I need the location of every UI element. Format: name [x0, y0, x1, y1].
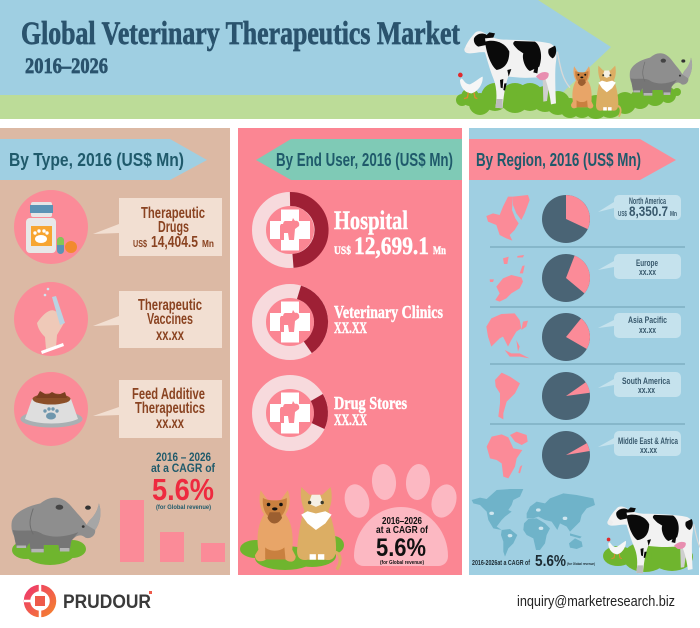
callout: therapeutic vaccines: xx.xx [156, 327, 184, 344]
pie: middle east and africa [542, 431, 590, 479]
header banner [0, 0, 700, 119]
callout: north america [598, 195, 681, 220]
pie: north america [542, 195, 590, 243]
panel: by type [0, 128, 230, 575]
panel: by end user [238, 128, 462, 575]
pie: europe [542, 254, 590, 302]
paw CAGR badge: 2016–2026 [382, 515, 422, 527]
callout: europe: xx.xx [639, 267, 657, 278]
icon: food bowl [14, 372, 88, 446]
world map CAGR note [472, 553, 595, 570]
illustration: dog and cat on grass [240, 487, 344, 570]
paw CAGR badge: (for Global revenue) [380, 560, 424, 566]
world map CAGR note: (for Global revenue) [567, 561, 595, 566]
end user heading: By End User, 2016 (US$ Mn) [276, 150, 453, 170]
callout: feed additive therapeutics [93, 380, 222, 438]
callout: therapeutic drugs: 14,404.5 [151, 234, 198, 251]
paw CAGR badge [341, 463, 461, 566]
illustration: cow and chicken on grass [603, 506, 700, 574]
callout: asia pacific [598, 313, 681, 338]
hospital value: US$ [334, 243, 351, 257]
donut: drug stores [259, 382, 321, 444]
bar chart [120, 500, 225, 562]
callout: south america: South America [622, 376, 671, 387]
callout: therapeutic drugs: Drugs [158, 219, 189, 236]
icon: hand with syringe [14, 282, 88, 356]
map: asia pacific [486, 313, 530, 358]
CAGR text: at a CAGR of [151, 461, 216, 475]
drug stores value [334, 393, 407, 429]
veterinary clinics value: XX.XX [334, 320, 367, 337]
callout: feed additive therapeutics: Feed Additive [132, 386, 205, 403]
logo: prudour: PRUDOUR [63, 592, 151, 613]
CAGR text [151, 450, 216, 511]
callout: therapeutic drugs [93, 198, 222, 256]
callout: therapeutic vaccines [93, 291, 222, 348]
drug stores value: Drug Stores [334, 393, 407, 413]
contact email: inquiry@marketresearch.biz [517, 593, 675, 610]
pie: asia pacific [542, 313, 590, 361]
end user heading arrow [256, 139, 462, 180]
veterinary clinics value [334, 302, 443, 337]
callout: europe: Europe [636, 258, 658, 269]
donut: veterinary clinics [259, 291, 321, 353]
world map [472, 489, 595, 557]
callout: north america: North America [629, 196, 666, 207]
callout: north america: US$ [618, 211, 627, 218]
callout: therapeutic drugs: Therapeutic [141, 205, 205, 222]
callout: feed additive therapeutics: xx.xx [156, 415, 184, 432]
map: middle east and africa [487, 432, 528, 478]
callout: north america: 8,350.7 [629, 203, 668, 219]
panel: by region [469, 128, 700, 575]
hospital value: Mn [433, 243, 446, 257]
paw CAGR badge: at a CAGR of [376, 524, 428, 536]
callout: asia pacific: xx.xx [639, 325, 657, 336]
world map CAGR note: 2016-2026at a CAGR of [472, 560, 530, 567]
pie: south america [542, 372, 590, 420]
drug stores value: XX.XX [334, 412, 367, 429]
icon: medicine bottle [14, 190, 88, 264]
header arrow [0, 0, 611, 95]
callout: south america: xx.xx [638, 385, 656, 396]
hospital value: Hospital [334, 206, 408, 235]
callout: north america: Mn [670, 211, 677, 218]
by type heading: By Type, 2016 (US$ Mn) [9, 150, 184, 170]
callout: feed additive therapeutics: Therapeutics [135, 400, 205, 417]
subtitle years: 2016–2026 [25, 53, 108, 78]
map: south america [495, 373, 520, 419]
callout: middle east and africa [598, 431, 681, 456]
callout: therapeutic vaccines: Vaccines [147, 311, 193, 328]
callout: south america [598, 372, 681, 397]
callout: asia pacific: Asia Pacific [628, 315, 667, 326]
world map CAGR note: 5.6% [535, 553, 566, 570]
CAGR text: (for Global revenue) [156, 504, 211, 511]
CAGR text: 5.6% [152, 472, 214, 507]
map: north america [486, 195, 530, 241]
callout: therapeutic drugs: US$ [133, 239, 147, 250]
CAGR text: 2016 – 2026 [156, 450, 211, 464]
hospital value: 12,699.1 [354, 233, 429, 260]
callout: middle east and africa: xx.xx [640, 445, 658, 456]
title: Global Veterinary Therapeutics Market [21, 16, 460, 52]
by type heading arrow [0, 139, 207, 180]
header illustration: farm animals on grass [456, 31, 692, 119]
callout: europe [598, 254, 681, 279]
hospital value [334, 206, 446, 260]
paw CAGR badge: 5.6% [376, 534, 426, 562]
callout: therapeutic vaccines: Therapeutic [138, 297, 202, 314]
illustration: rhino on grass [11, 498, 100, 565]
logo: prudour [24, 584, 152, 618]
region heading arrow [469, 139, 676, 180]
veterinary clinics value: Veterinary Clinics [334, 302, 443, 322]
callout: therapeutic drugs: Mn [202, 239, 214, 250]
donut: hospital [259, 199, 322, 261]
region heading: By Region, 2016 (US$ Mn) [476, 150, 641, 170]
map: europe [490, 255, 525, 302]
